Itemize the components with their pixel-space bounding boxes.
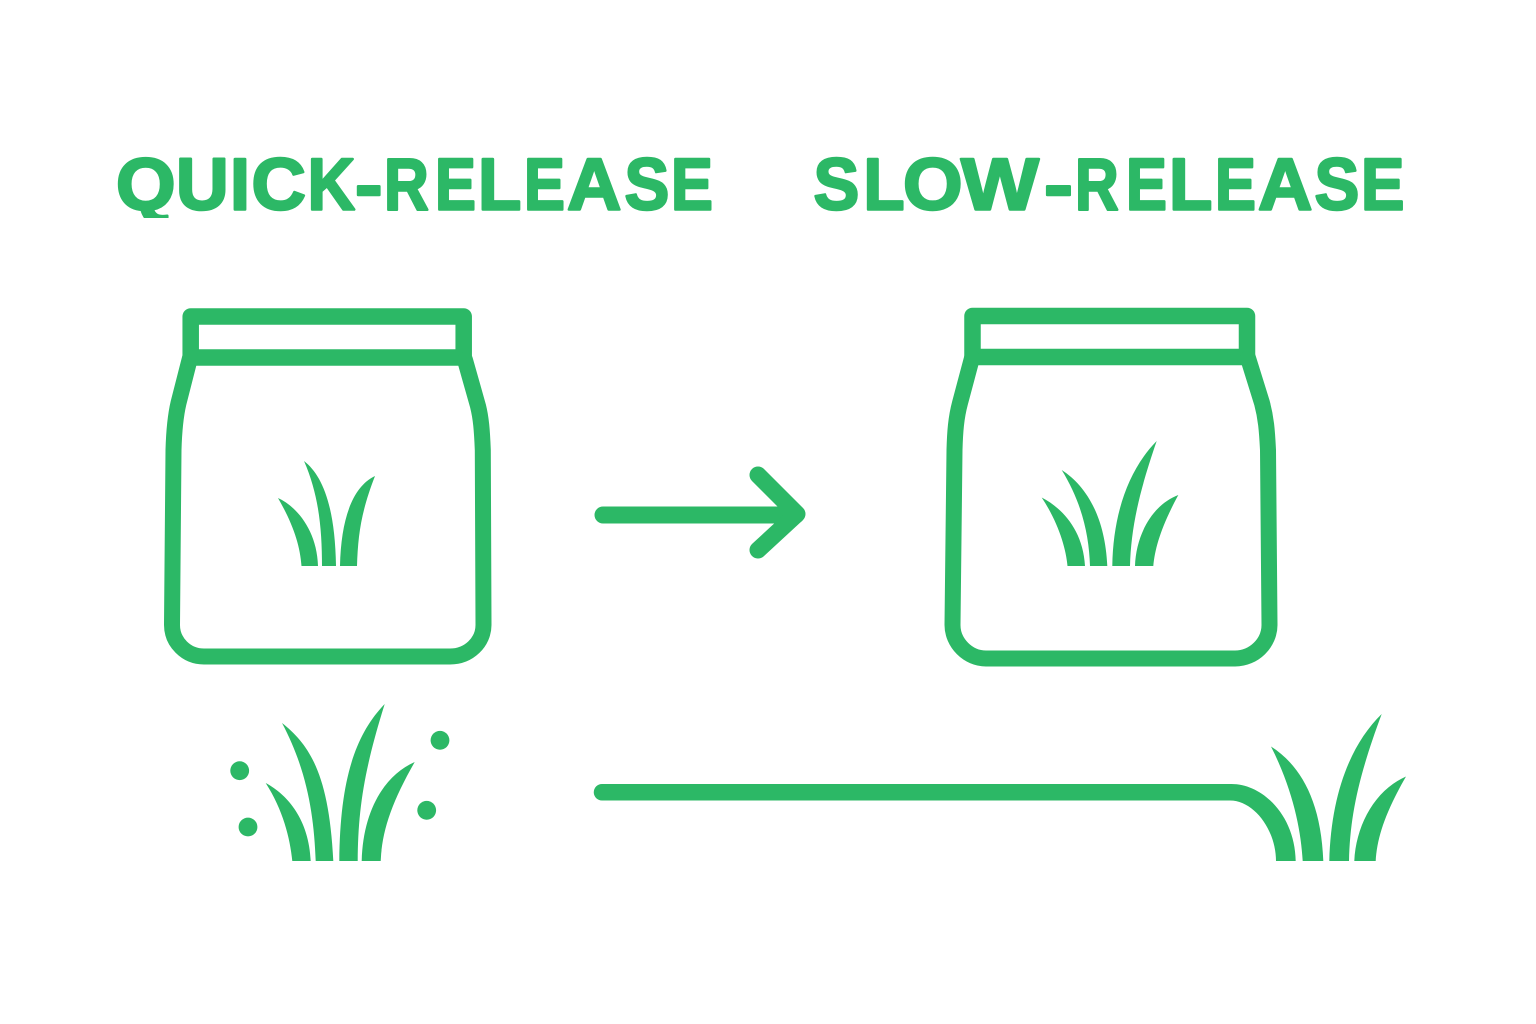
- heading: quick-release: L: [478, 144, 521, 226]
- icon: slow-release fertilizer bag: [952, 316, 1270, 658]
- heading: quick-release: -: [355, 144, 382, 226]
- icon: quick-release fertilizer bag: [172, 316, 484, 656]
- heading: quick-release: U: [176, 144, 229, 226]
- icon: grass in quick-release bag: [278, 461, 375, 566]
- heading: quick-release: E: [524, 144, 565, 226]
- heading: slow-release: S: [1314, 144, 1359, 226]
- heading: quick-release: E: [435, 144, 476, 226]
- heading: quick-release: K: [308, 144, 355, 226]
- heading: slow-release: L: [864, 144, 904, 226]
- heading: slow-release: A: [1258, 144, 1312, 226]
- granules: [230, 731, 449, 836]
- heading: quick-release: E: [671, 144, 713, 226]
- icon: grass with fertilizer granules: [230, 704, 449, 861]
- icon: grown grass at timeline end: [1271, 714, 1406, 861]
- heading: quick-release: R: [384, 144, 429, 226]
- heading: slow-release: E: [1361, 144, 1404, 226]
- heading: slow-release: L: [1169, 144, 1212, 226]
- heading: quick-release: A: [567, 144, 621, 226]
- heading: slow-release: E: [1215, 144, 1256, 226]
- heading: quick-release: I: [230, 144, 250, 226]
- timeline line curving into grass: [594, 784, 1296, 861]
- heading: quick-release: S: [624, 144, 669, 226]
- heading: quick-release: Q: [116, 144, 176, 226]
- arrow: quick to slow: [603, 475, 797, 550]
- heading: slow-release: -: [1044, 144, 1073, 226]
- heading: slow-release: O: [903, 144, 963, 226]
- icon: grass in slow-release bag: [1042, 441, 1178, 566]
- heading: slow-release: R: [1075, 144, 1119, 226]
- heading: slow-release: W: [961, 144, 1039, 226]
- heading: slow-release: E: [1126, 144, 1167, 226]
- heading: slow-release: S: [814, 144, 859, 226]
- heading: quick-release: C: [252, 144, 306, 226]
